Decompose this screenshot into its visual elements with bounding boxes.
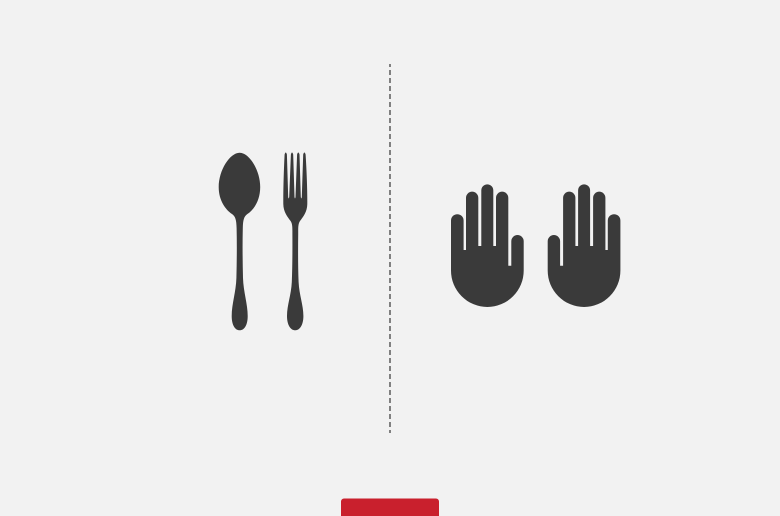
- icon: right hand: [548, 184, 620, 307]
- icon: fork: [283, 152, 307, 330]
- divider: dashed line: [389, 64, 391, 433]
- red button: [341, 498, 439, 516]
- icon: spoon: [219, 153, 260, 330]
- icon: left hand: [451, 184, 524, 307]
